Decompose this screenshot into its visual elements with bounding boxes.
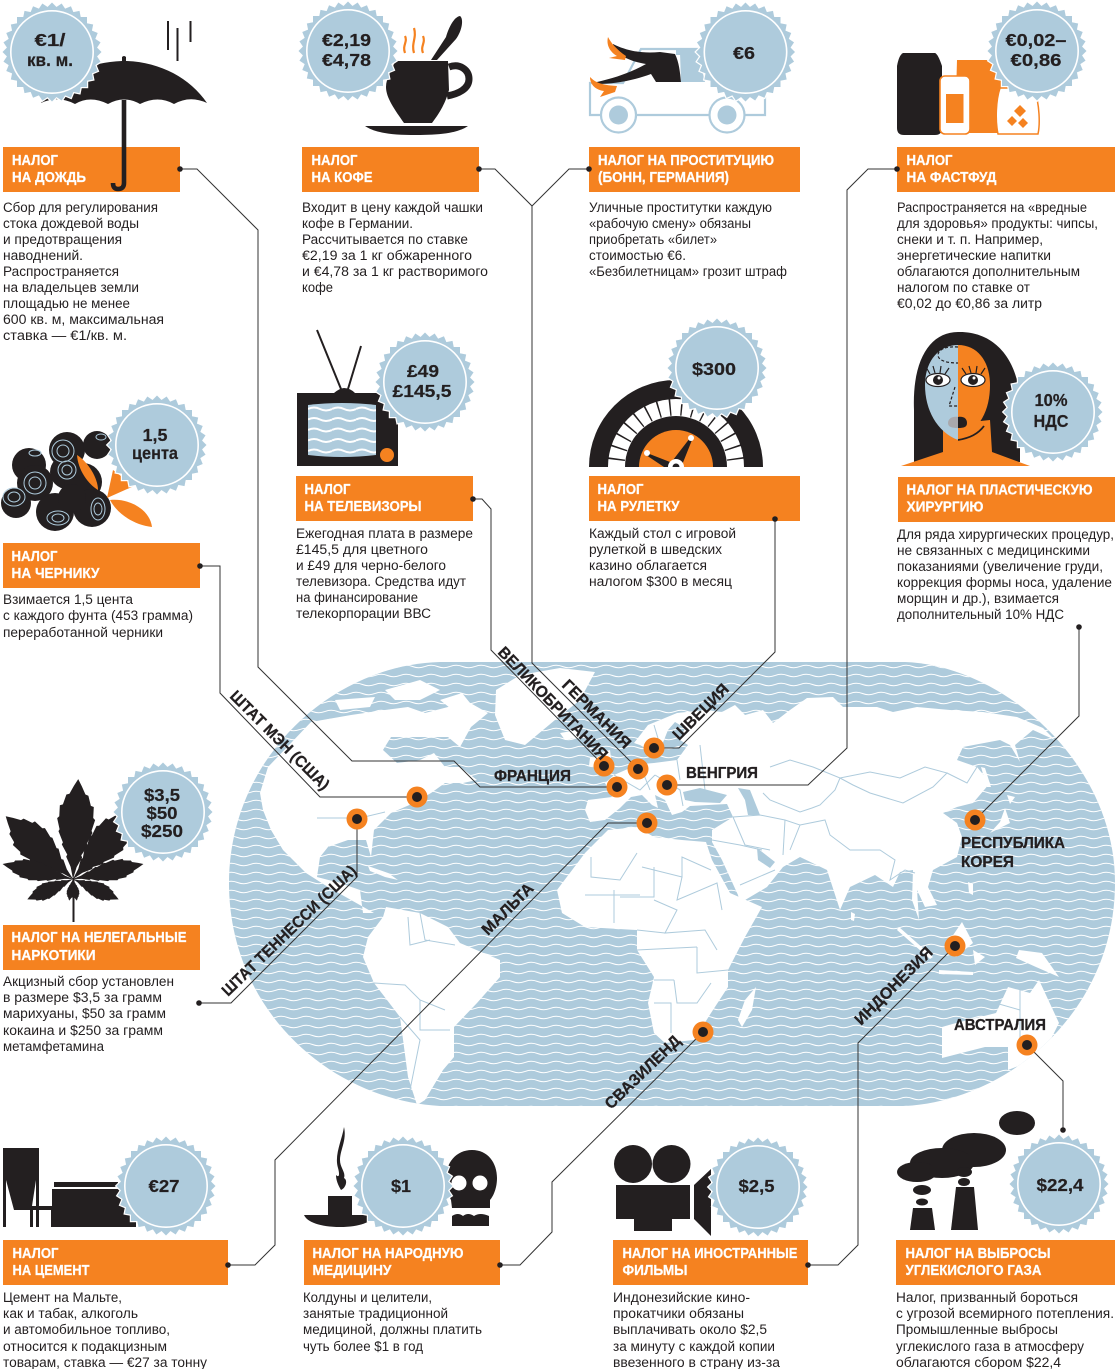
icon: candle and skull: [304, 1127, 497, 1227]
heading bar: CO2 emissions tax: [896, 1240, 1115, 1285]
map country labels: [219, 644, 1065, 1113]
heading bar: plastic surgery tax: ХИРУРГИЮ: [906, 500, 984, 516]
panel: blueberry tax: [1, 394, 208, 640]
text: TV tax: телекорпорации ВВС: [296, 606, 431, 621]
price badge: foreign films tax: $2,5: [738, 1176, 775, 1196]
price badge: folk medicine tax: $1: [391, 1176, 411, 1196]
text: cement tax: относится к подакцизным: [3, 1339, 167, 1354]
panel: coffee tax: [297, 0, 488, 295]
continents: [260, 668, 1059, 1105]
map country labels: ШВЕЦИЯ: [670, 681, 733, 744]
text: TV tax: и £49 для черно-белого: [296, 558, 446, 573]
heading bar: illegal drugs tax: [3, 925, 200, 970]
text: prostitution tax: «Безбилетницам» грозит штраф: [589, 264, 787, 279]
map country labels: ИНДОНЕЗИЯ: [852, 944, 937, 1029]
heading bar: coffee tax: НА КОФЕ: [312, 170, 373, 186]
text: illegal drugs tax: [3, 974, 174, 1054]
panel: cement tax: [3, 1135, 231, 1369]
text: foreign films tax: прокатчики обязаны: [613, 1306, 744, 1321]
text: roulette tax: налогом $300 в месяц: [589, 574, 732, 589]
heading bar: blueberry tax: [3, 543, 203, 588]
text: illegal drugs tax: в размере $3,5 за грамм: [3, 990, 162, 1005]
icon: coffee cup: [365, 16, 469, 135]
panel: folk medicine tax: [303, 1127, 503, 1354]
text: prostitution tax: стоимостью €6.: [589, 248, 686, 263]
price badge: prostitution tax: [694, 1, 797, 103]
text: plastic surgery tax: Для ряда хирургических процедур,: [897, 527, 1114, 542]
map country labels: МАЛЬТА: [479, 880, 538, 939]
price badge: CO2 emissions tax: [1008, 1133, 1110, 1235]
price badge: illegal drugs tax: $3,5: [144, 785, 180, 805]
map country labels: ВЕНГРИЯ: [686, 765, 758, 782]
text: TV tax: £145,5 для цветного: [296, 542, 428, 557]
text: plastic surgery tax: морщин и др.), взимается: [897, 591, 1059, 606]
price badge: rain tax: [1, 1, 103, 103]
text: folk medicine tax: медициной, должны платить: [303, 1322, 482, 1337]
text: cement tax: Цемент на Мальте,: [3, 1290, 122, 1305]
text: coffee tax: [302, 200, 488, 295]
heading bar: roulette tax: НАЛОГ: [598, 482, 644, 498]
text: illegal drugs tax: марихуаны, $50 за грамм: [3, 1006, 166, 1021]
map ocean: [229, 662, 1115, 1106]
heading bar: foreign films tax: [613, 1240, 811, 1285]
icon: blueberries: [1, 431, 152, 531]
text: prostitution tax: приобретать «билет»: [589, 232, 717, 247]
text: rain tax: Распространяется: [3, 264, 119, 279]
price badge: coffee tax: €2,19: [322, 30, 371, 50]
text: roulette tax: казино облагается: [589, 558, 707, 573]
price badge: roulette tax: [666, 317, 768, 419]
heading bar: CO2 emissions tax: УГЛЕКИСЛОГО ГАЗА: [906, 1263, 1042, 1279]
heading bar: rain tax: [3, 147, 183, 192]
heading bar: rain tax: НАЛОГ: [12, 153, 58, 169]
leader lines: [180, 169, 1079, 1265]
price badge: rain tax: €1/: [34, 30, 66, 50]
text: fast food tax: €0,02 до €0,86 за литр: [897, 296, 1042, 311]
text: fast food tax: облагаются дополнительным: [897, 264, 1080, 279]
heading bar: prostitution tax: НАЛОГ НА ПРОСТИТУЦИЮ: [598, 153, 774, 169]
heading bar: TV tax: НА ТЕЛЕВИЗОРЫ: [304, 499, 422, 515]
text: folk medicine tax: [303, 1290, 482, 1354]
text: foreign films tax: за минуту с каждой копии: [613, 1339, 775, 1354]
heading bar: cement tax: НА ЦЕМЕНТ: [12, 1263, 90, 1279]
text: rain tax: наводнений.: [3, 248, 83, 263]
text: plastic surgery tax: дополнительный 10% НДС: [897, 607, 1064, 622]
heading bar: CO2 emissions tax: НАЛОГ НА ВЫБРОСЫ: [906, 1246, 1050, 1262]
price badge: blueberry tax: цента: [132, 443, 178, 463]
price badge: cement tax: [115, 1135, 217, 1237]
heading bar: cement tax: [3, 1240, 231, 1285]
price badge: rain tax: кв. м.: [27, 50, 73, 70]
map country labels: ШТАТ ТЕННЕССИ (США): [219, 863, 360, 1000]
price badge: illegal drugs tax: $50: [146, 803, 178, 823]
country borders: [317, 725, 1020, 1090]
price badge: coffee tax: €4,78: [322, 50, 371, 70]
text: fast food tax: снеки и т. п. Например,: [897, 232, 1043, 247]
text: CO2 emissions tax: с угрозой всемирного потепления.: [896, 1306, 1114, 1321]
price badge: CO2 emissions tax: $22,4: [1036, 1175, 1084, 1195]
text: CO2 emissions tax: [896, 1290, 1114, 1369]
map country labels: ШТАТ МЭН (США): [226, 688, 332, 794]
text: rain tax: [3, 200, 164, 343]
text: foreign films tax: выплачивать около $2,5: [613, 1322, 767, 1337]
heading bar: fast food tax: НА ФАСТФУД: [906, 170, 996, 186]
text: fast food tax: для здоровья» продукты: чипсы,: [897, 216, 1098, 231]
heading bar: blueberry tax: НАЛОГ: [12, 549, 58, 565]
text: coffee tax: кофе в Германии.: [302, 216, 413, 231]
heading bar: coffee tax: НАЛОГ: [312, 153, 358, 169]
heading bar: folk medicine tax: [304, 1240, 503, 1285]
map country labels: ГЕРМАНИЯ: [558, 677, 634, 752]
text: fast food tax: энергетические напитки: [897, 248, 1051, 263]
icon: television: [297, 330, 398, 466]
icon: cannabis leaf: [0, 778, 148, 922]
map markers: [346, 738, 1038, 1056]
text: plastic surgery tax: коррекция формы носа, удаление: [897, 575, 1112, 590]
text: blueberry tax: переработанной черники: [3, 625, 163, 640]
text: cement tax: как и табак, алкоголь: [3, 1306, 138, 1321]
panel: plastic surgery tax: [897, 332, 1115, 630]
map country labels: ВЕЛИКОБРИТАНИЯ: [494, 644, 611, 764]
price badge: foreign films tax: [707, 1136, 809, 1238]
heading bar: blueberry tax: НА ЧЕРНИКУ: [12, 566, 100, 582]
text: coffee tax: кофе: [302, 280, 333, 295]
text: illegal drugs tax: метамфетамина: [3, 1039, 105, 1054]
text: blueberry tax: с каждого фунта (453 грамма): [3, 608, 193, 623]
price badge: folk medicine tax: [352, 1135, 454, 1237]
text: TV tax: телевизора. Средства идут: [296, 574, 466, 589]
icon: roulette wheel: [589, 380, 763, 467]
text: TV tax: на финансирование: [296, 590, 418, 605]
text: fast food tax: налогом по ставке от: [897, 280, 1030, 295]
heading bar: prostitution tax: [586, 147, 800, 192]
heading bar: plastic surgery tax: [898, 477, 1115, 522]
text: plastic surgery tax: показаниями (увеличение груди,: [897, 559, 1103, 574]
price badge: roulette tax: $300: [692, 359, 736, 379]
text: TV tax: [296, 526, 473, 621]
heading bar: roulette tax: [589, 476, 800, 522]
heading bar: illegal drugs tax: НАЛОГ НА НЕЛЕГАЛЬНЫЕ: [12, 930, 187, 946]
icon: film camera: [614, 1145, 711, 1236]
text: cement tax: и автомобильное топливо,: [3, 1322, 170, 1337]
text: roulette tax: [589, 526, 736, 589]
text: rain tax: стока дождевой воды: [3, 216, 139, 231]
price badge: prostitution tax: €6: [733, 43, 755, 63]
price badge: plastic surgery tax: 10%: [1034, 390, 1068, 410]
text: foreign films tax: Индонезийские кино-: [613, 1290, 750, 1305]
text: rain tax: Сбор для регулирования: [3, 200, 158, 215]
heading bar: plastic surgery tax: НАЛОГ НА ПЛАСТИЧЕСКУЮ: [906, 482, 1093, 498]
map country labels: РЕСПУБЛИКА: [961, 835, 1065, 852]
icon: snack packages: [897, 53, 1039, 135]
text: prostitution tax: «рабочую смену» обязаны: [589, 216, 751, 231]
heading bar: TV tax: [296, 476, 476, 521]
text: plastic surgery tax: [897, 527, 1114, 622]
price badge: plastic surgery tax: НДС: [1034, 411, 1069, 431]
price badge: TV tax: £49: [407, 361, 439, 381]
price badge: illegal drugs tax: $250: [141, 821, 183, 841]
text: CO2 emissions tax: углекислого газа в атмосферу: [896, 1339, 1084, 1354]
price badge: TV tax: £145,5: [392, 381, 452, 401]
heading bar: folk medicine tax: НАЛОГ НА НАРОДНУЮ: [312, 1246, 464, 1262]
price badge: blueberry tax: [106, 394, 208, 496]
leader dot: plastic surgery tax: [1076, 624, 1082, 630]
panel: roulette tax: [589, 317, 800, 589]
heading bar: illegal drugs tax: НАРКОТИКИ: [12, 948, 96, 964]
icon: factory chimneys and smoke: [897, 1111, 1035, 1230]
text: coffee tax: и €4,78 за 1 кг растворимого: [302, 264, 488, 279]
world map: [229, 662, 1115, 1106]
heading bar: coffee tax: [302, 147, 482, 192]
price badge: illegal drugs tax: [112, 761, 214, 863]
text: fast food tax: [897, 200, 1098, 311]
panel: rain tax: [1, 1, 207, 343]
text: rain tax: и предотвращения: [3, 232, 122, 247]
map country labels: ФРАНЦИЯ: [494, 768, 571, 785]
map country labels: АВСТРАЛИЯ: [954, 1017, 1046, 1034]
text: CO2 emissions tax: Промышленные выбросы: [896, 1322, 1058, 1337]
panel: foreign films tax: [613, 1136, 811, 1369]
heading bar: folk medicine tax: МЕДИЦИНУ: [312, 1263, 392, 1279]
text: prostitution tax: Уличные проститутки каждую: [589, 200, 772, 215]
panel: fast food tax: [894, 0, 1115, 311]
text: rain tax: площадью не менее: [3, 296, 130, 311]
heading bar: TV tax: НАЛОГ: [304, 482, 350, 498]
price badge: plastic surgery tax: [1002, 361, 1104, 463]
text: coffee tax: Рассчитывается по ставке: [302, 232, 468, 247]
text: coffee tax: Входит в цену каждой чашки: [302, 200, 483, 215]
heading bar: rain tax: НА ДОЖДЬ: [12, 170, 86, 186]
price badge: fast food tax: €0,02–: [1006, 30, 1067, 50]
text: plastic surgery tax: не связанных с медицинскими: [897, 543, 1090, 558]
panel: illegal drugs tax: [0, 761, 214, 1054]
panel: prostitution tax: [586, 1, 800, 279]
text: CO2 emissions tax: Налог, призванный бороться: [896, 1290, 1078, 1305]
text: prostitution tax: [589, 200, 787, 279]
map country labels: СВАЗИЛЕНД: [602, 1032, 685, 1113]
text: blueberry tax: [3, 592, 193, 640]
heading bar: cement tax: НАЛОГ: [12, 1246, 58, 1262]
text: folk medicine tax: Колдуны и целители,: [303, 1290, 432, 1305]
text: cement tax: [3, 1290, 207, 1369]
text: coffee tax: €2,19 за 1 кг обжаренного: [302, 248, 472, 263]
text: illegal drugs tax: Акцизный сбор установлен: [3, 974, 174, 989]
price badge: TV tax: [374, 331, 476, 433]
heading bar: prostitution tax: (БОНН, ГЕРМАНИЯ): [598, 170, 729, 186]
leader dot: illegal drugs tax: [196, 1000, 202, 1006]
text: fast food tax: Распространяется на «вредные: [897, 200, 1087, 215]
text: folk medicine tax: чуть более $1 в год: [303, 1339, 423, 1354]
heading bar: fast food tax: [894, 147, 1115, 192]
text: roulette tax: Каждый стол с игровой: [589, 526, 736, 541]
panel: TV tax: [296, 330, 476, 621]
price badge: fast food tax: [986, 0, 1088, 102]
text: foreign films tax: [613, 1290, 781, 1369]
heading bar: foreign films tax: НАЛОГ НА ИНОСТРАННЫЕ: [622, 1246, 798, 1262]
heading bar: foreign films tax: ФИЛЬМЫ: [622, 1263, 688, 1279]
leader dot: CO2 emissions tax: [1060, 1127, 1066, 1133]
text: rain tax: 600 кв. м, максимальная: [3, 312, 164, 327]
icon: cement plant: [3, 1148, 136, 1227]
text: rain tax: на владельцев земли: [3, 280, 139, 295]
icon: face: [901, 332, 1030, 466]
map country labels: КОРЕЯ: [961, 854, 1014, 871]
icon: car with legs: [590, 37, 765, 132]
text: illegal drugs tax: кокаина и $250 за грамм: [3, 1023, 163, 1038]
panel: CO2 emissions tax: [896, 1111, 1115, 1369]
price badge: blueberry tax: 1,5: [142, 425, 168, 445]
text: rain tax: ставка — €1/кв. м.: [3, 328, 127, 343]
heading bar: fast food tax: НАЛОГ: [906, 153, 952, 169]
text: blueberry tax: Взимается 1,5 цента: [3, 592, 134, 607]
text: folk medicine tax: занятые традиционной: [303, 1306, 448, 1321]
heading bar: roulette tax: НА РУЛЕТКУ: [598, 499, 680, 515]
text: TV tax: Ежегодная плата в размере: [296, 526, 473, 541]
text: roulette tax: рулеткой в шведских: [589, 542, 722, 557]
price badge: cement tax: €27: [148, 1176, 180, 1196]
price badge: coffee tax: [297, 0, 399, 102]
icon: umbrella: [41, 21, 207, 189]
price badge: fast food tax: €0,86: [1010, 50, 1062, 70]
